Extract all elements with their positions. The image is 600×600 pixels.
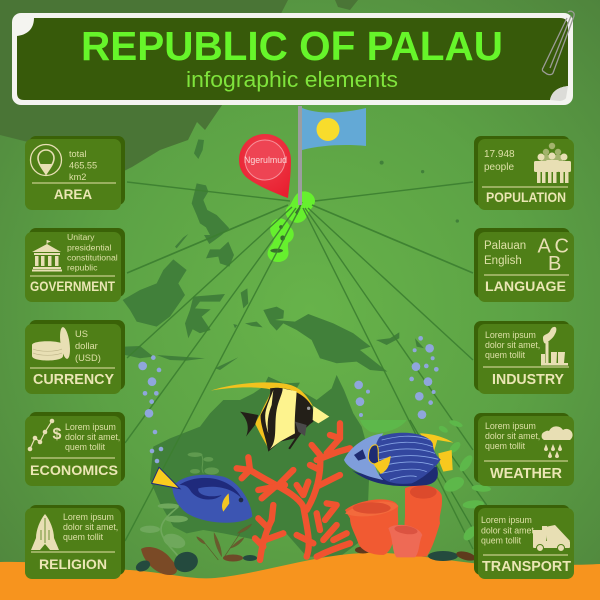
icon: location pin — [30, 144, 62, 176]
text: transport: quem tollit — [481, 536, 522, 546]
title banner — [12, 13, 573, 105]
icon: rain cloud — [542, 426, 573, 458]
text: religion: dolor sit amet, — [63, 522, 118, 532]
map: dark landmasses — [0, 0, 459, 557]
label: government: GOVERNMENT — [30, 279, 116, 294]
text: industry: dolor sit amet, — [485, 340, 540, 350]
panel: religion — [25, 505, 125, 579]
text: transport: dolor sit amet, — [481, 526, 536, 536]
text: government type: presidential — [67, 242, 112, 252]
sand seabed — [0, 553, 600, 600]
panel: industry — [474, 321, 574, 394]
text: transport: Lorem ipsum — [481, 515, 532, 525]
icon: letters: A — [538, 236, 552, 258]
text: currency value: dollar — [75, 341, 98, 351]
panel: government — [25, 228, 125, 302]
moorish idol fish — [211, 382, 329, 452]
text: economics: Lorem ipsum — [65, 422, 116, 432]
text: population value: 17.948 — [484, 149, 515, 160]
icon: letters: C — [554, 236, 569, 258]
label: population: POPULATION — [486, 190, 566, 205]
icon: government building — [32, 240, 62, 272]
label: area: AREA — [54, 187, 92, 202]
label: transport: TRANSPORT — [482, 559, 571, 575]
label: language: LANGUAGE — [485, 278, 566, 294]
map pin: capital: Ngerulmud — [244, 155, 287, 165]
text: currency value: US — [75, 329, 88, 339]
heading: REPUBLIC OF PALAU — [81, 23, 503, 69]
label: economics: ECONOMICS — [30, 462, 118, 478]
icon: coins — [32, 327, 72, 360]
label: religion: RELIGION — [39, 556, 107, 572]
text: economics: dolor sit amet, — [65, 432, 120, 442]
left plant — [140, 503, 188, 557]
icon: factory — [541, 327, 568, 366]
label: currency: CURRENCY — [33, 372, 114, 388]
text: weather: Lorem ipsum — [485, 421, 536, 431]
text: religion: Lorem ipsum — [63, 512, 114, 522]
sponge corals — [345, 485, 442, 557]
text: economics: quem tollit — [65, 442, 106, 452]
panel: weather — [474, 413, 574, 486]
subheading: infographic elements — [186, 67, 398, 92]
text: area value: total — [69, 149, 86, 159]
text: languages: Palauan — [484, 240, 526, 252]
panel: transport — [474, 505, 574, 579]
blue tang fish — [152, 467, 252, 523]
icon: growth chart with dollar: $ — [53, 426, 62, 443]
text: area value: 465.55 — [69, 160, 97, 170]
icon: letters: B — [548, 253, 561, 275]
text: government type: constitutional — [67, 252, 118, 262]
red coral — [237, 423, 350, 560]
air bubbles — [138, 336, 439, 463]
text: industry: Lorem ipsum — [485, 330, 536, 340]
text: languages: English — [484, 255, 522, 267]
icon: paperclip — [542, 11, 574, 75]
label: weather: WEATHER — [490, 466, 563, 482]
panel: area — [25, 136, 125, 210]
text: population value: people — [484, 162, 514, 173]
panel: population — [474, 136, 574, 210]
icon: praying hands — [31, 514, 59, 550]
text: area value: km2 — [69, 172, 86, 182]
text: religion: quem tollit — [63, 532, 104, 542]
icon: people group — [534, 143, 571, 183]
text: industry: quem tollit — [485, 350, 526, 360]
stones — [134, 546, 477, 575]
highlighted islands of Palau — [268, 191, 315, 262]
text: government type: Unitary — [67, 232, 95, 242]
Australia silhouette — [150, 375, 370, 557]
emperor angelfish — [344, 433, 453, 486]
flag with pole — [298, 106, 366, 205]
panel: economics — [25, 412, 125, 486]
text: currency value: (USD) — [75, 353, 101, 363]
radial connector lines — [125, 182, 473, 549]
small back plant — [188, 452, 219, 475]
brown sea grass — [197, 524, 252, 560]
text: government type: republic — [67, 262, 98, 272]
text: weather: dolor sit amet, — [485, 431, 540, 441]
icon: dump truck — [533, 525, 570, 552]
label: industry: INDUSTRY — [492, 372, 564, 388]
panel: language — [474, 228, 574, 302]
right plant — [360, 419, 491, 543]
panel: currency — [25, 320, 125, 394]
map pin: capital — [239, 134, 291, 198]
text: weather: quem tollit — [485, 441, 526, 451]
